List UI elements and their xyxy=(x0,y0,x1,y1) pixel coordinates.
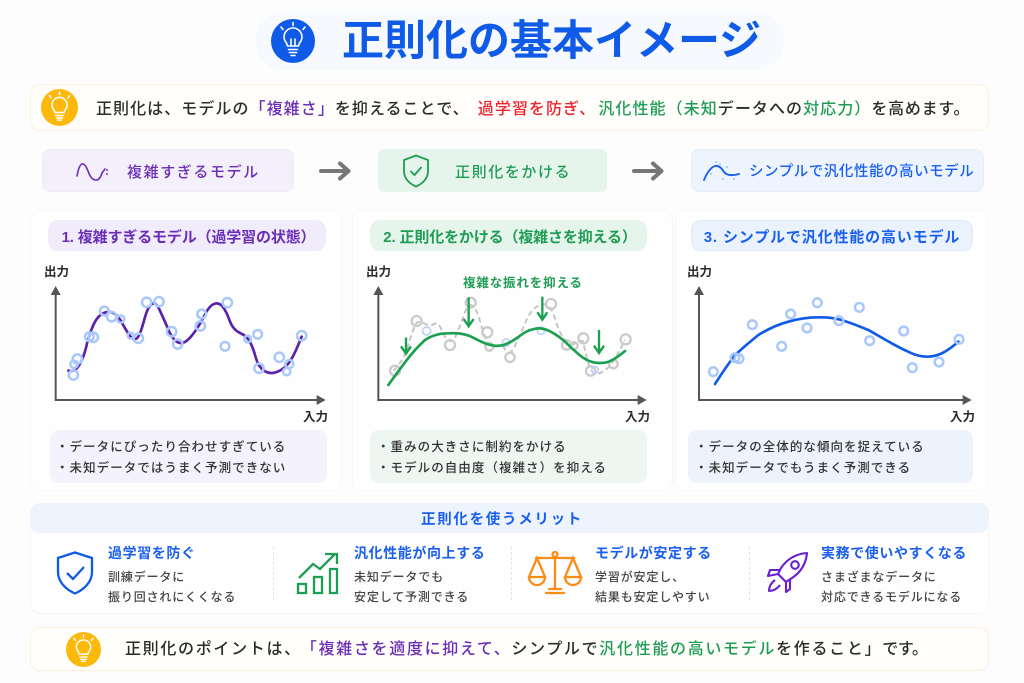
icon: smooth curve xyxy=(703,161,740,181)
title text: 正則化の基本イメージ xyxy=(342,17,761,64)
icon: shield xyxy=(403,154,429,188)
panel 1 note: ・未知データではうまく予測できない xyxy=(56,461,286,475)
panel 3 heading xyxy=(691,220,973,251)
benefit 2 xyxy=(296,552,338,594)
panel 1: complex model xyxy=(30,210,342,491)
flow step 1: complex model xyxy=(42,149,294,192)
panel 2 heading xyxy=(370,220,647,251)
benefit 4 text: さまざまなデータに xyxy=(821,570,937,584)
benefit 1 text: 訓練データに xyxy=(108,570,185,584)
banner text: 正則化は、モデルの「複雑さ」を抑えることで、 過学習を防ぎ、汎化性能（未知データへの対応力）を高めます。 xyxy=(96,101,970,118)
down arrows xyxy=(401,297,604,354)
benefits heading: 正則化を使うメリット xyxy=(421,512,583,528)
benefit 1 text: 振り回されにくくなる xyxy=(108,590,236,604)
faint blue data points xyxy=(423,327,598,373)
icon: growth chart xyxy=(296,552,338,594)
panel 2 chart xyxy=(373,286,646,405)
icon: shield xyxy=(56,551,94,595)
panel 2 x label: 入力 xyxy=(625,410,650,424)
benefit 4 text: 対応できるモデルになる xyxy=(821,590,962,604)
panel 1 heading: 1. 複雑すぎるモデル（過学習の状態） xyxy=(62,229,315,246)
regularized curve xyxy=(388,328,625,385)
panel 3 note: ・データの全体的な傾向を捉えている xyxy=(695,440,925,454)
panel 2 note xyxy=(370,430,647,483)
panel 2 y label: 出力 xyxy=(366,265,391,279)
panel 3 y label: 出力 xyxy=(687,265,712,279)
axes xyxy=(373,286,647,405)
footer text: 正則化のポイントは、 「複雑さを適度に抑えて、シンプルで汎化性能の高いモデルを作ること」です。 xyxy=(125,641,928,658)
data points xyxy=(709,298,963,376)
benefit 1 xyxy=(56,551,94,595)
step text: 正則化をかける xyxy=(455,164,571,180)
benefit 1 text xyxy=(108,570,236,604)
panel 1 chart xyxy=(50,286,326,405)
panel 1 y label: 出力 xyxy=(44,265,69,279)
panel 2 heading: 2. 正則化をかける（複雑さを抑える） xyxy=(383,229,637,246)
overfit curve xyxy=(68,303,302,373)
arrow: step 2 to 3 xyxy=(632,161,664,181)
panel 1 heading xyxy=(48,220,326,251)
panel 3 heading: 3. シンプルで汎化性能の高いモデル xyxy=(704,229,960,246)
icon: rocket xyxy=(767,552,808,594)
panel 3 note xyxy=(688,430,973,483)
panel 1 note: ・データにぴったり合わせすぎている xyxy=(56,440,286,454)
benefit 3 text: 学習が安定し、 xyxy=(595,570,685,584)
benefit 4 xyxy=(767,552,808,594)
axes xyxy=(694,286,972,405)
benefit 3 text: 結果も安定しやすい xyxy=(595,590,711,604)
panel 3 chart xyxy=(694,286,972,405)
benefit 3 xyxy=(527,550,583,594)
original wiggle, dashed xyxy=(393,305,625,374)
benefit 2 text xyxy=(354,570,469,604)
data points xyxy=(69,297,306,380)
panel 3: simple model xyxy=(675,210,988,491)
icon: balance scale xyxy=(527,550,583,594)
axes xyxy=(51,286,326,405)
step text: 複雑すぎるモデル xyxy=(127,164,260,181)
banner: definition xyxy=(30,84,989,131)
footer: key point xyxy=(30,627,989,671)
panel 3 x label: 入力 xyxy=(950,410,975,424)
panel 1 x label: 入力 xyxy=(303,410,328,424)
icon: yellow bulb xyxy=(66,632,101,667)
icon: wiggle xyxy=(76,163,108,181)
benefit 4 text xyxy=(821,570,962,604)
icon: yellow bulb xyxy=(41,89,78,126)
benefit 1 heading: 過学習を防ぐ xyxy=(108,545,196,561)
panel 3 note: ・未知データでもうまく予測できる xyxy=(695,461,911,475)
benefits section xyxy=(30,503,989,614)
flow step 3: simple model xyxy=(691,149,984,192)
faded data points xyxy=(390,298,631,376)
benefit 3 text xyxy=(595,570,711,604)
panel 1 note xyxy=(50,430,327,483)
chart callout: 複雑な振れを抑える xyxy=(463,276,583,290)
benefit 2 heading: 汎化性能が向上する xyxy=(354,545,485,561)
benefit 2 text: 安定して予測できる xyxy=(354,590,469,604)
panel 2 note: ・重みの大きさに制約をかける xyxy=(377,440,567,454)
step text: シンプルで汎化性能の高いモデル xyxy=(749,164,974,180)
arrow: step 1 to 2 xyxy=(319,161,351,181)
panel 2: regularize xyxy=(352,210,673,491)
flow step 2: regularize xyxy=(378,149,607,192)
smooth curve xyxy=(715,317,958,384)
panel 2 note: ・モデルの自由度（複雑さ）を抑える xyxy=(377,461,607,475)
benefit 4 heading: 実務で使いやすくなる xyxy=(821,545,967,561)
title xyxy=(255,12,784,70)
benefits heading xyxy=(30,503,989,533)
benefit 3 heading: モデルが安定する xyxy=(595,545,712,561)
icon: title light bulb xyxy=(271,19,315,63)
benefit 2 text: 未知データでも xyxy=(354,570,444,584)
